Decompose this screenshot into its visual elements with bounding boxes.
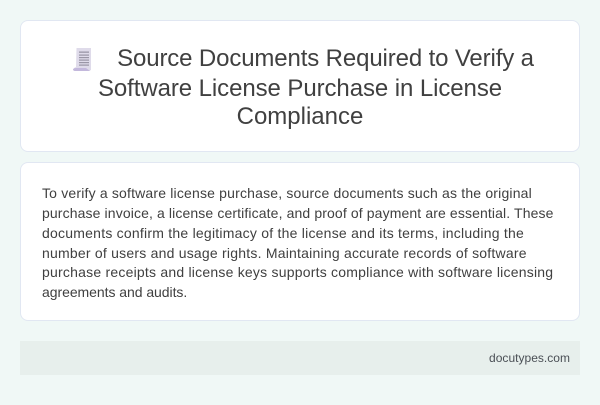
description text: agreements and audits.: [42, 284, 187, 300]
description text: purchase receipts and license keys supports compliance with software licensing: [42, 264, 553, 280]
title: Software License Purchase in License: [98, 75, 502, 102]
description text: purchase invoice, a license certificate, and proof of payment are essential. These: [42, 205, 554, 221]
title: Source Documents Required to Verify a: [117, 45, 534, 72]
panel: title card: [20, 20, 580, 152]
footer bar: [20, 341, 580, 375]
footer source label: docutypes.com: [489, 351, 570, 365]
title: [98, 45, 534, 130]
title: Compliance: [237, 103, 363, 130]
description text: To verify a software license purchase, source documents such as the original: [42, 185, 532, 201]
description text: documents confirm the legitimacy of the license and its terms, including the: [42, 225, 524, 241]
description text: number of users and usage rights. Maintaining accurate records of software: [42, 245, 527, 261]
panel: description card: [20, 162, 580, 321]
description text: [42, 185, 554, 300]
icon: document receipt: [73, 48, 91, 71]
